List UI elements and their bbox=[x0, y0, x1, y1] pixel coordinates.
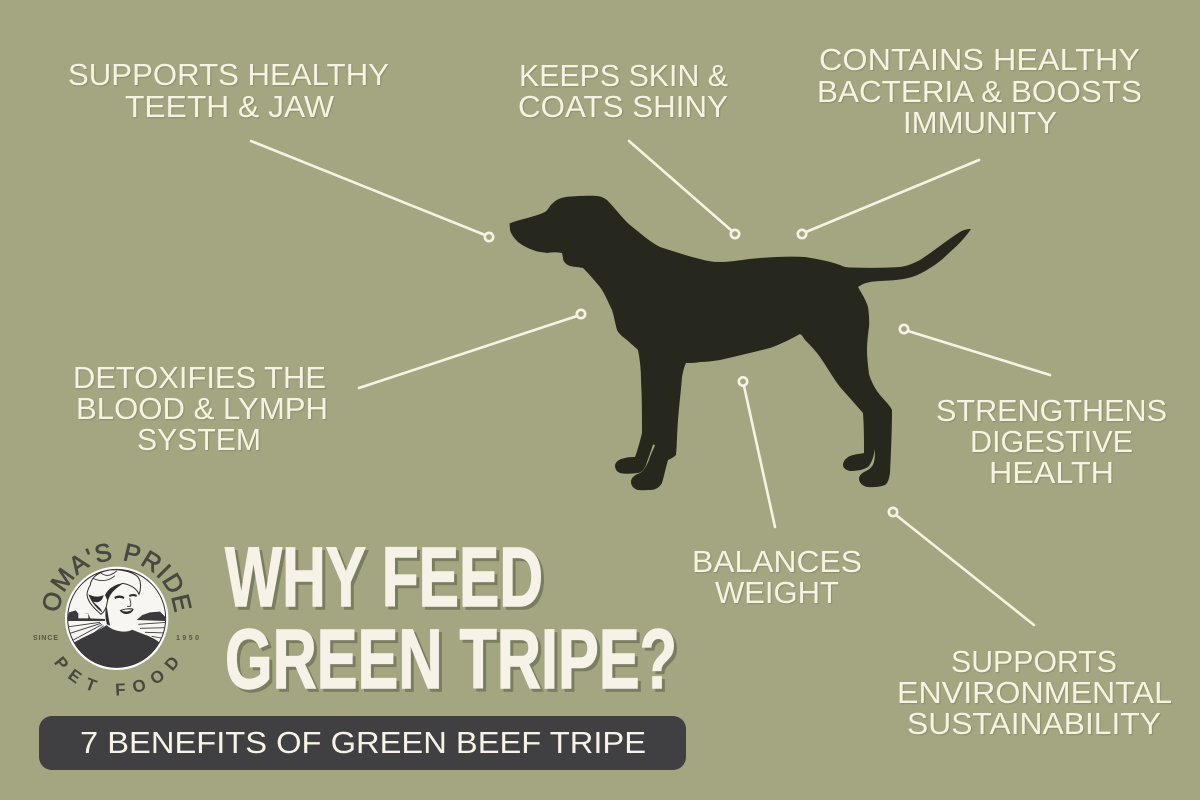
banner: 7 benefits of green beef tripe bbox=[39, 716, 686, 770]
sweater bbox=[74, 625, 159, 667]
facial features bbox=[114, 594, 137, 599]
neck and face bbox=[107, 625, 132, 632]
arrow: bacteria and immunity pointer bbox=[798, 160, 979, 238]
callout: keeps skin and coats shiny: KEEPS SKIN & bbox=[519, 58, 728, 93]
callout: keeps skin and coats shiny bbox=[518, 58, 728, 124]
arrow: skin and coat pointer bbox=[629, 141, 739, 238]
callout: detoxifies the blood and lymph system: BLOOD & LYMPH bbox=[76, 391, 328, 426]
callout: detoxifies the blood and lymph system: DETOXIFIES THE bbox=[73, 360, 326, 395]
title line 1: WHY FEED bbox=[225, 530, 543, 624]
logo arc text: Oma's Pride: OMA'S PRIDE bbox=[43, 543, 192, 612]
title line 2: GREEN TRIPE? bbox=[225, 612, 677, 706]
trees and barn bbox=[67, 610, 167, 621]
callout: supports environmental sustainability: ENVIRONMENTAL bbox=[897, 675, 1172, 710]
callout: detoxifies the blood and lymph system: SYSTEM bbox=[137, 422, 261, 457]
callout: balances weight: WEIGHT bbox=[715, 575, 839, 610]
arrow: detox pointer bbox=[359, 310, 585, 388]
arrow: weight pointer bbox=[739, 377, 775, 527]
arrow: environmental sustainability pointer bbox=[889, 508, 1034, 625]
arrow: digestive health pointer bbox=[900, 325, 1050, 375]
callout: balances weight: BALANCES bbox=[692, 544, 862, 579]
logo: Oma's Pride Pet Food bbox=[33, 543, 199, 696]
callout: contains healthy bacteria and boosts immunity bbox=[817, 42, 1142, 140]
title bbox=[225, 530, 677, 706]
callout: contains healthy bacteria and boosts immunity: CONTAINS HEALTHY bbox=[819, 42, 1140, 77]
callout: supports healthy teeth and jaw: TEETH & JAW bbox=[125, 89, 335, 124]
hair strands bbox=[88, 583, 122, 626]
logo arc text: Pet Food: PET FOOD bbox=[54, 656, 178, 696]
callout: supports healthy teeth and jaw bbox=[68, 57, 389, 124]
callout: contains healthy bacteria and boosts immunity: BACTERIA & BOOSTS bbox=[817, 74, 1142, 109]
callout: detoxifies the blood and lymph system bbox=[73, 360, 328, 457]
callout: strengthens digestive health bbox=[936, 393, 1167, 490]
callout: supports environmental sustainability bbox=[897, 644, 1172, 741]
callout: strengthens digestive health: STRENGTHENS bbox=[936, 393, 1167, 428]
callout: supports environmental sustainability: SUPPORTS bbox=[951, 644, 1117, 679]
callout: supports healthy teeth and jaw: SUPPORTS HEALTHY bbox=[68, 57, 389, 92]
callout: contains healthy bacteria and boosts immunity: IMMUNITY bbox=[903, 105, 1057, 140]
fields bbox=[69, 622, 165, 640]
arrow: teeth and jaw pointer bbox=[251, 141, 493, 241]
logo text: since: SINCE bbox=[33, 635, 58, 642]
logo portrait badge bbox=[65, 567, 168, 672]
callout: strengthens digestive health: DIGESTIVE bbox=[970, 424, 1133, 459]
hair bbox=[87, 570, 141, 614]
logo text: 1950: 1950 bbox=[176, 635, 199, 642]
callout: strengthens digestive health: HEALTH bbox=[989, 455, 1114, 490]
dog silhouette bbox=[510, 196, 971, 490]
callout: keeps skin and coats shiny: COATS SHINY bbox=[518, 89, 728, 124]
banner: 7 benefits of green beef tripe: 7 BENEFITS OF GREEN BEEF TRIPE bbox=[80, 725, 646, 760]
callout: supports environmental sustainability: SUSTAINABILITY bbox=[907, 706, 1161, 741]
callout: balances weight bbox=[692, 544, 862, 610]
